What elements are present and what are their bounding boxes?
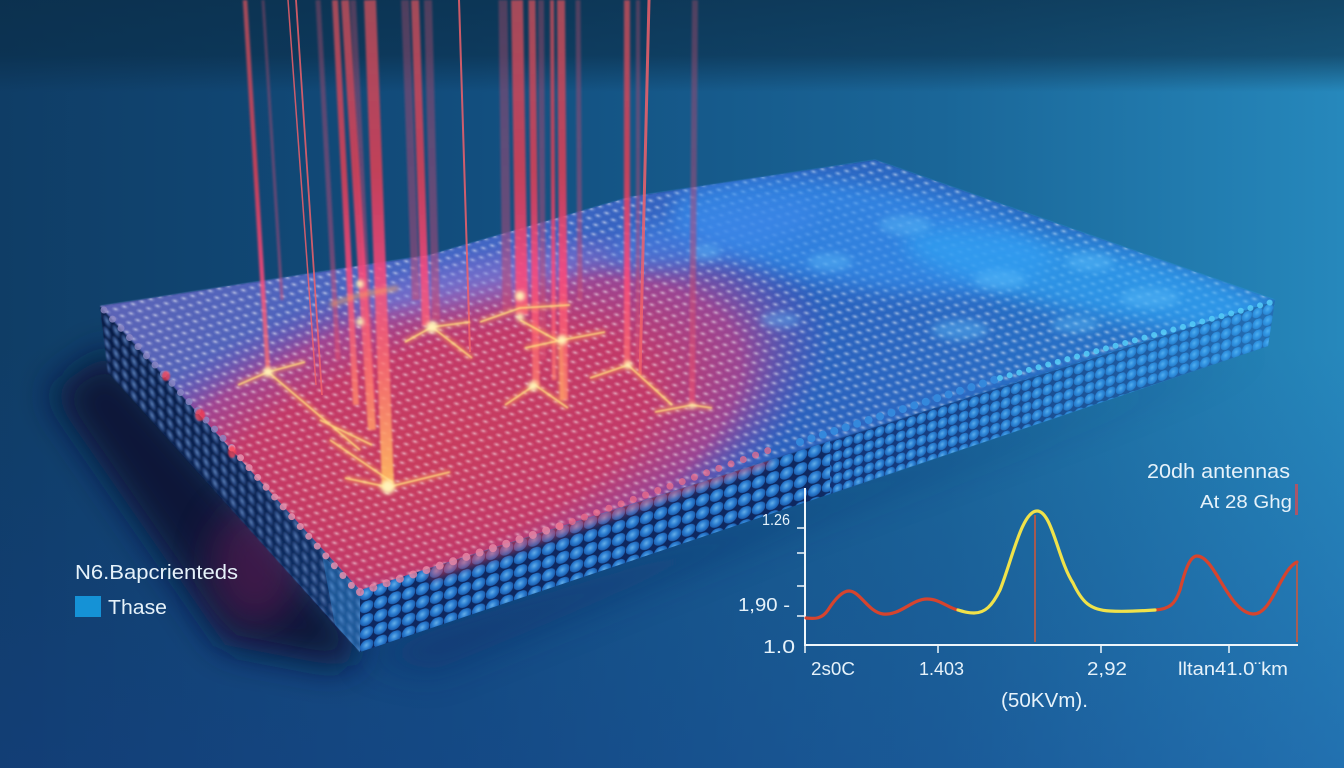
curve: yellow section xyxy=(958,511,1155,613)
axis labels: 1.0 xyxy=(763,637,795,657)
thin beams xyxy=(288,0,649,395)
top surface xyxy=(90,150,1290,600)
glowing junctions on the surface xyxy=(238,280,712,494)
axis labels: 2,92 xyxy=(1087,659,1127,679)
red hot spots on the rim xyxy=(162,371,236,458)
mottled light spots xyxy=(689,215,1180,340)
shadow under the slab xyxy=(50,350,1268,672)
faint companion beams xyxy=(263,0,695,405)
bead rows along the edges xyxy=(104,302,1272,592)
axis labels: 2s0C xyxy=(811,659,855,679)
soft mottled glow on the far side xyxy=(356,168,1267,342)
curve: red sections xyxy=(806,556,1297,618)
main beams xyxy=(245,0,627,488)
red laser beams xyxy=(245,0,695,488)
axis labels: lltan41.0¨km xyxy=(1178,659,1288,679)
legend item: Thase xyxy=(108,597,167,619)
axis labels: (50KVm). xyxy=(1001,690,1088,712)
marker lines xyxy=(1035,515,1297,642)
chart heading: At 28 Ghg xyxy=(1200,492,1292,512)
axis labels: 1.26 xyxy=(762,512,790,529)
axis labels: 1.403 xyxy=(919,659,964,679)
left side face xyxy=(100,306,360,652)
legend title: N6.Bapcrienteds xyxy=(75,562,238,584)
axes xyxy=(797,488,1298,653)
legend swatch xyxy=(75,596,101,617)
chart heading: 20dh antennas xyxy=(1147,461,1290,483)
axis labels xyxy=(738,512,1288,712)
nanoparticle slab xyxy=(90,150,1290,652)
chart heading xyxy=(1147,461,1298,515)
line chart xyxy=(738,488,1298,712)
axis labels: 1,90 - xyxy=(738,595,790,615)
legend xyxy=(75,562,238,619)
right side face xyxy=(360,300,1275,652)
